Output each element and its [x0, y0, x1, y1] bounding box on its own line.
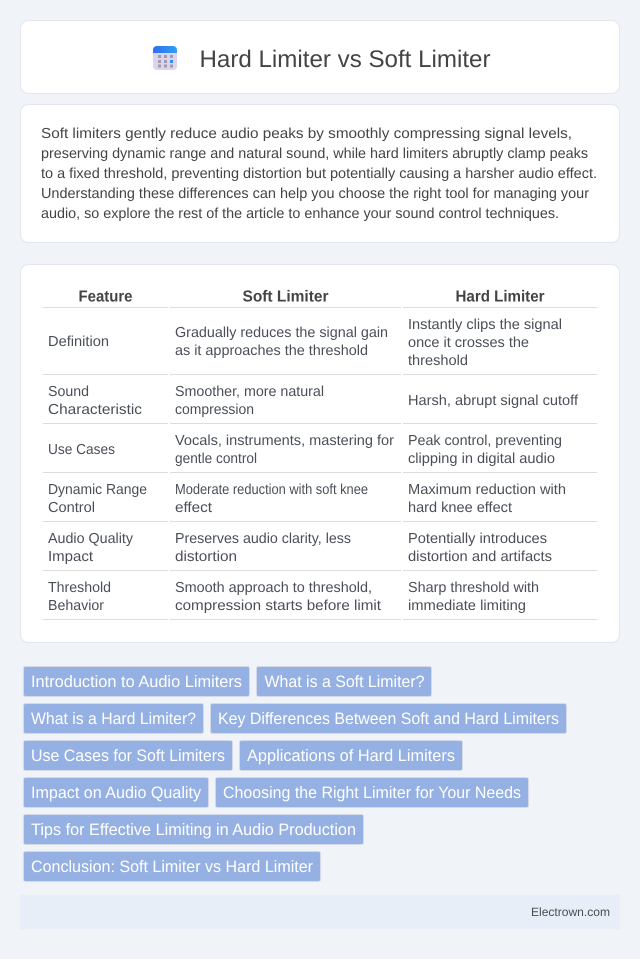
tag: conclusion: Conclusion: Soft Limiter vs Hard Limiter [31, 858, 313, 876]
panel: intro paragraph [20, 104, 620, 242]
text block: intro: Soft limiters gently reduce audio peaks by smoothly compressing signal levels, [41, 126, 572, 142]
tag: applications: Applications of Hard Limiters [247, 747, 455, 765]
tag: tips: Tips for Effective Limiting in Audio Production [31, 821, 356, 839]
tag: key differences: Key Differences Between Soft and Hard Limiters [218, 710, 559, 728]
text block: intro: Understanding these differences can help you choose the right tool for managing your [41, 186, 589, 202]
table row: definition: once it crosses the [408, 335, 529, 351]
tag: soft limiter: What is a Soft Limiter? [264, 673, 424, 691]
table row: audio quality impact: Impact [48, 549, 93, 565]
table row: audio quality impact [48, 531, 552, 565]
tag: choosing [216, 778, 528, 808]
table row: audio quality impact: Audio Quality [48, 531, 134, 547]
table row: threshold behavior: Behavior [48, 598, 104, 614]
panel: title card [20, 20, 620, 94]
tag: soft limiter [256, 666, 432, 696]
table row: threshold behavior: compression starts before limit [175, 598, 381, 614]
text block: intro: to a fixed threshold, preventing distortion but potentially causing a harsher audio effect. [41, 166, 597, 182]
table row: audio quality impact: Potentially introduces [408, 531, 547, 547]
tag: choosing: Choosing the Right Limiter for Your Needs [223, 784, 521, 802]
table row: dynamic range control: hard knee effect [408, 500, 512, 516]
table row: use cases: Vocals, instruments, mastering for [175, 433, 394, 449]
table header: Feature [78, 288, 133, 306]
panel: comparison table [20, 264, 620, 642]
table row: sound characteristic: Smoother, more natural [175, 384, 324, 400]
table row: dynamic range control: Moderate reduction with soft knee [175, 482, 368, 498]
table row: audio quality impact: distortion and artifacts [408, 549, 552, 565]
tag: use cases: Use Cases for Soft Limiters [31, 747, 225, 765]
tag: key differences [210, 704, 566, 734]
tag: hard limiter [24, 704, 204, 734]
tag: introduction [24, 666, 250, 696]
tag: conclusion [24, 852, 320, 882]
text block: intro: audio, so explore the rest of the article to enhance your sound control techniques. [41, 206, 559, 222]
table row: audio quality impact: distortion [175, 549, 237, 565]
table row: sound characteristic: Sound [48, 384, 89, 400]
table row: use cases: Peak control, preventing [408, 433, 562, 449]
tag: applications [240, 740, 462, 770]
table row: dynamic range control: Maximum reduction with [408, 482, 566, 498]
table row: threshold behavior: Sharp threshold with [408, 580, 539, 596]
table row: threshold behavior [48, 580, 539, 614]
table row: threshold behavior: Smooth approach to threshold, [175, 580, 372, 596]
table row: use cases: Use Cases [48, 442, 115, 458]
tag: impact [24, 778, 208, 808]
table row: definition: Gradually reduces the signal gain [175, 325, 388, 341]
table row: definition: threshold [408, 353, 468, 369]
text block: intro: preserving dynamic range and natural sound, while hard limiters abruptly clamp peaks [41, 146, 588, 162]
table row: threshold behavior: Threshold [48, 580, 111, 596]
table row: dynamic range control: Control [48, 500, 95, 516]
table row: sound characteristic [48, 384, 579, 418]
table row: audio quality impact: Preserves audio clarity, less [175, 531, 351, 547]
footer: Electrown.com [531, 905, 610, 919]
table row: definition: Instantly clips the signal [408, 317, 562, 333]
table row: sound characteristic: Harsh, abrupt signal cutoff [408, 393, 579, 409]
table row: definition: as it approaches the threshold [175, 343, 368, 359]
table row: definition: Definition [48, 334, 109, 350]
table header [78, 288, 544, 306]
table header: Hard Limiter [456, 288, 544, 306]
table row: use cases [48, 433, 562, 467]
table row: sound characteristic: Characteristic [48, 402, 142, 418]
table row: dynamic range control: Dynamic Range [48, 482, 147, 498]
text block: intro [41, 126, 597, 222]
tag links [24, 666, 566, 882]
table row: use cases: clipping in digital audio [408, 451, 555, 467]
tag: hard limiter: What is a Hard Limiter? [31, 710, 196, 728]
tag: use cases [24, 740, 232, 770]
table row: definition [48, 317, 562, 369]
table header: Soft Limiter [242, 288, 328, 306]
table row: use cases: gentle control [175, 451, 257, 467]
icon: calendar [153, 46, 177, 70]
table row: dynamic range control: effect [175, 500, 212, 516]
table row: sound characteristic: compression [175, 402, 254, 418]
table row: threshold behavior: immediate limiting [408, 598, 526, 614]
tag: impact: Impact on Audio Quality [31, 784, 202, 802]
title: Hard Limiter vs Soft Limiter [200, 46, 491, 73]
table row: dynamic range control [48, 482, 566, 516]
tag: introduction: Introduction to Audio Limiters [31, 673, 242, 691]
tag: tips [24, 814, 364, 844]
footer [20, 895, 620, 929]
